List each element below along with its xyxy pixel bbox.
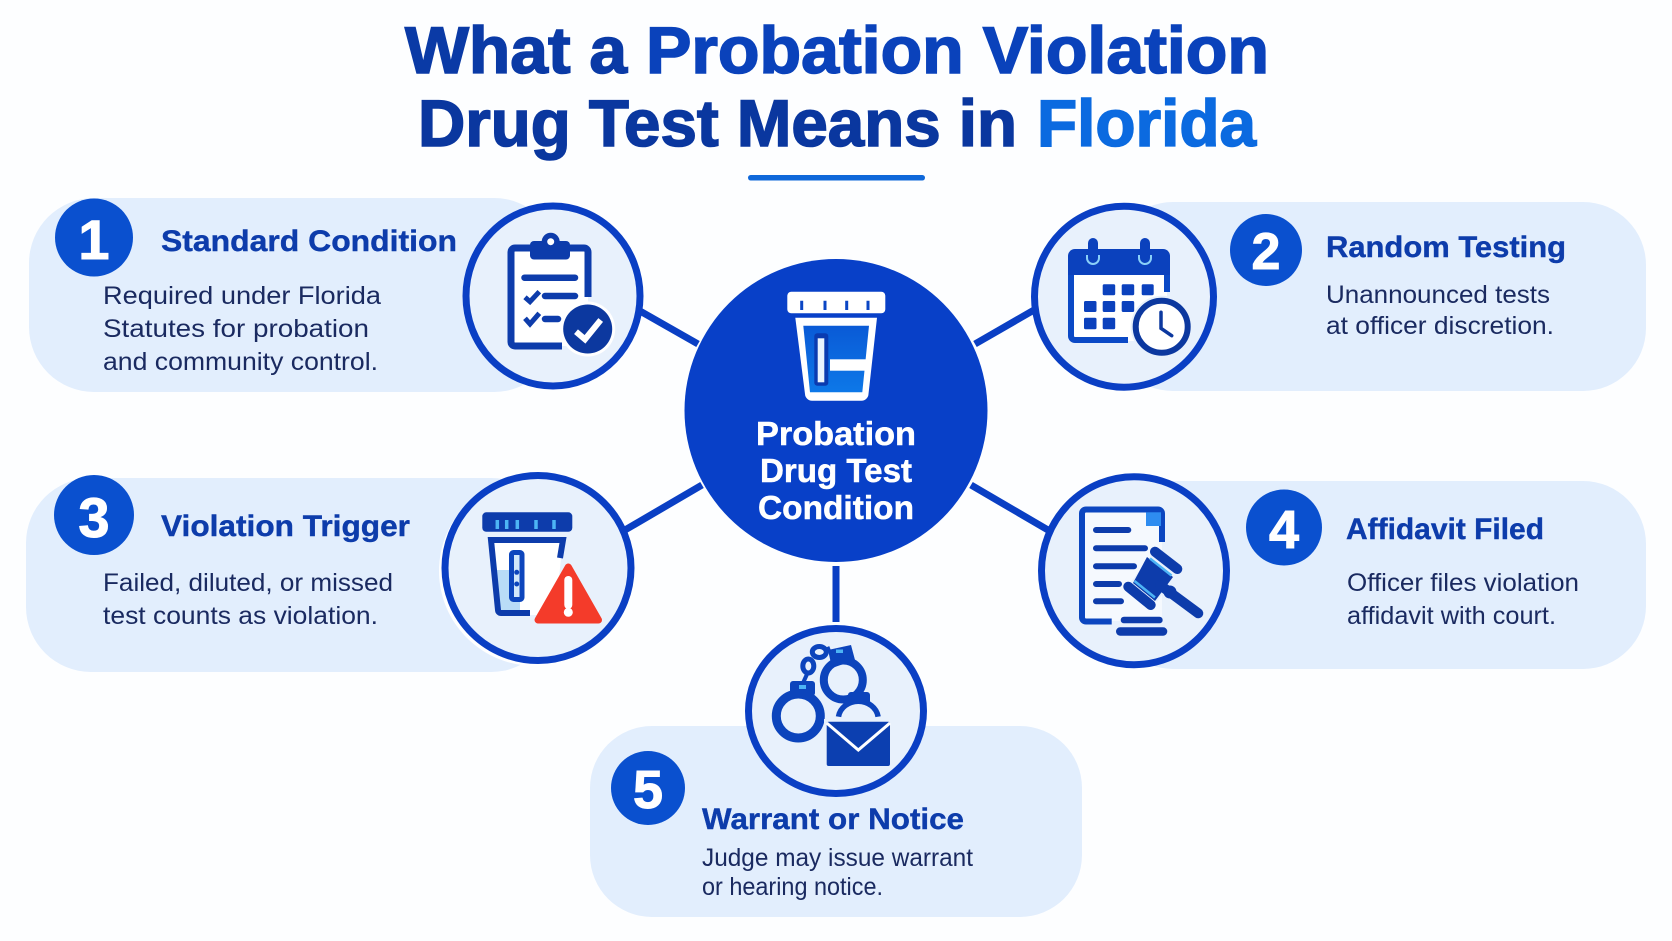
- badge 4: [1246, 490, 1322, 566]
- icon: clipboard with check: [466, 206, 640, 386]
- icon: handcuffs and envelope: [748, 628, 924, 794]
- central hub: probation drug test condition: [684, 259, 988, 562]
- body text: random testing: Unannounced tests: [1326, 281, 1550, 309]
- icon: calendar with clock: [1034, 206, 1214, 387]
- heading: standard condition: Standard Condition: [161, 225, 457, 258]
- connector: centre to step 1: [640, 311, 698, 344]
- body text: violation trigger: test counts as violation.: [103, 602, 378, 630]
- icon: document with gavel: [1042, 477, 1226, 665]
- badge 2: [1230, 214, 1302, 286]
- body text: affidavit filed: Officer files violation: [1347, 569, 1579, 597]
- hub label: Drug Test: [760, 452, 912, 489]
- connector: centre to step 3: [625, 485, 702, 530]
- panel: step 3 violation trigger: [26, 475, 631, 672]
- panel: step 4 affidavit filed: [1042, 477, 1646, 669]
- badge 3: 3: [78, 486, 110, 549]
- title: [405, 13, 1269, 160]
- hub label: Condition: [758, 489, 914, 526]
- badge 2: 2: [1252, 223, 1280, 281]
- body text: affidavit filed: affidavit with court.: [1347, 602, 1556, 630]
- heading: affidavit filed: Affidavit Filed: [1346, 513, 1544, 546]
- body text: standard condition: Required under Florida: [103, 282, 381, 310]
- body text: standard condition: [103, 282, 381, 376]
- body text: violation trigger: [103, 569, 393, 630]
- connector: centre to step 5: [832, 566, 840, 622]
- body text: violation trigger: Failed, diluted, or missed: [103, 569, 393, 597]
- hub label: [756, 415, 916, 526]
- badge 3: [54, 475, 134, 555]
- hub label: Probation: [756, 415, 916, 452]
- body text: warrant or notice: or hearing notice.: [702, 873, 883, 901]
- heading: violation trigger: Violation Trigger: [161, 510, 410, 543]
- body text: random testing: [1326, 281, 1554, 340]
- heading: warrant or notice: Warrant or Notice: [702, 803, 964, 836]
- body text: warrant or notice: [702, 844, 973, 901]
- body text: standard condition: Statutes for probation: [103, 315, 369, 343]
- body text: affidavit filed: [1347, 569, 1579, 630]
- panel: step 5 warrant or notice: [590, 628, 1082, 917]
- title underline: [748, 175, 925, 180]
- panel: step 2 random testing: [1034, 202, 1646, 391]
- body text: random testing: at officer discretion.: [1326, 312, 1554, 340]
- title: Florida: [1037, 86, 1257, 160]
- connector: centre to step 4: [971, 485, 1048, 530]
- icon: test cup with warning: [439, 476, 631, 666]
- icon: specimen cup: [787, 292, 885, 401]
- badge 5: 5: [633, 760, 663, 820]
- heading: random testing: Random Testing: [1326, 231, 1566, 264]
- title: Drug Test Means in: [418, 86, 1017, 160]
- title: What a: [405, 13, 628, 87]
- connector: centre to step 2: [975, 310, 1034, 344]
- badge 1: [55, 198, 133, 276]
- panel: step 1 standard condition: [29, 198, 640, 392]
- badge 5: [611, 751, 685, 825]
- body text: warrant or notice: Judge may issue warrant: [702, 844, 973, 872]
- body text: standard condition: and community control.: [103, 348, 378, 376]
- title: Probation Violation: [646, 13, 1269, 87]
- badge 1: 1: [78, 208, 110, 271]
- badge 4: 4: [1269, 500, 1299, 560]
